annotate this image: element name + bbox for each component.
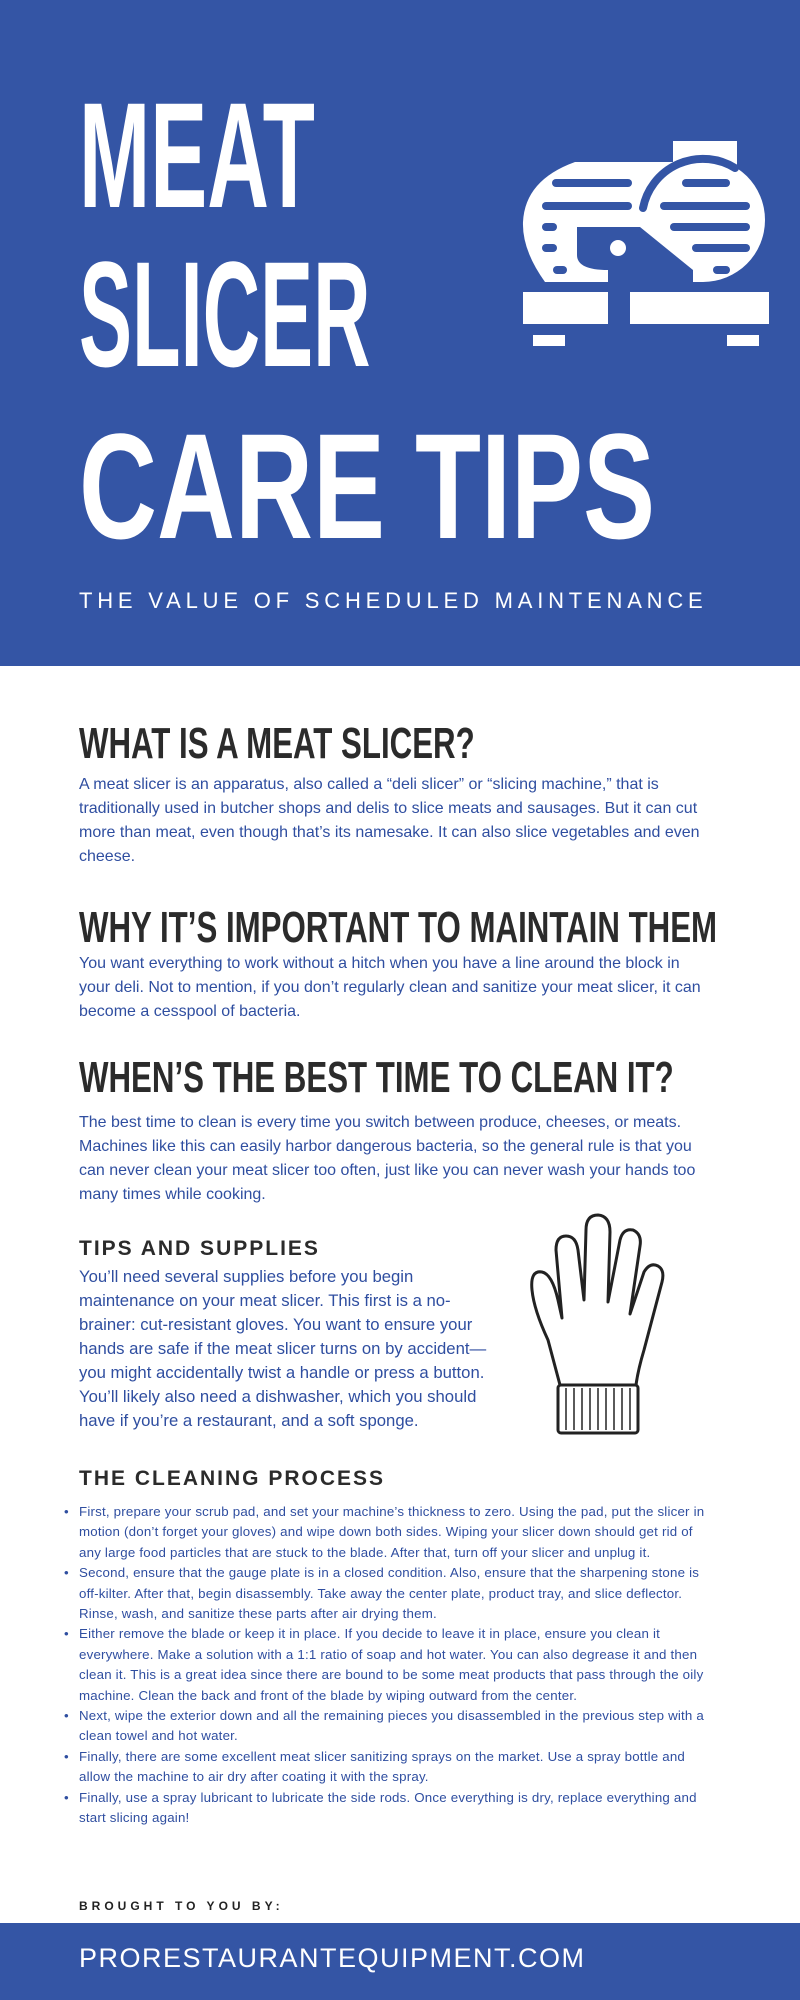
footer url: PRORESTAURANTEQUIPMENT.COM xyxy=(79,1943,586,1973)
list: cleaning steps: Finally, use a spray lubricant to lubricate the side rods. Once everything is dry, replace everything and start slicing again! xyxy=(79,1790,697,1825)
heading: why important: WHY IT’S IMPORTANT TO MAINTAIN THEM xyxy=(79,903,717,952)
icon: meat slicer xyxy=(522,141,769,346)
list: cleaning steps xyxy=(64,1504,704,1825)
text: tips: You’ll need several supplies before you begin maintenance on your meat slicer. This first is a no-brainer: cut-resistant gloves. You want to ensure your hands are safe if the meat slicer turns on by accident—you might accidentally twist a handle or press a button. You’ll likely also need a dishwasher, which you should have if you’re a restaurant, and a soft sponge. xyxy=(79,1267,486,1430)
icon: glove xyxy=(530,1214,664,1434)
subtitle: THE VALUE OF SCHEDULED MAINTENANCE xyxy=(79,588,708,613)
title xyxy=(79,71,655,570)
list: cleaning steps: Finally, there are some excellent meat slicer sanitizing sprays on the market. Use a spray bottle and allow the machine to air dry after coating it with the spray. xyxy=(79,1749,685,1784)
list: cleaning steps: Next, wipe the exterior down and all the remaining pieces you disassembled in the previous step with a clean towel and hot water. xyxy=(79,1708,704,1743)
list: cleaning steps: Either remove the blade or keep it in place. If you decide to leave it in place, ensure you clean it everywhere. Make a solution with a 1:1 ratio of soap and hot water. You can also degrease it and then clean it. This is a great idea since there are bound to be some meat products that pass through the oily machine. Clean the back and front of the blade by wiping outward from the center. xyxy=(79,1626,703,1703)
title: SLICER xyxy=(79,230,371,398)
title: MEAT xyxy=(79,71,315,239)
text: why: You want everything to work without a hitch when you have a line around the block in your deli. Not to mention, if you don’t regularly clean and sanitize your meat slicer, it can become a cesspool of bacteria. xyxy=(79,955,701,1020)
list: cleaning steps: Second, ensure that the gauge plate is in a closed condition. Also, ensure that the sharpening stone is off-kilter. After that, begin disassembly. Take away the center plate, product tray, and slice deflector. Rinse, wash, and sanitize these parts after air drying them. xyxy=(79,1565,699,1621)
heading: tips and supplies: TIPS AND SUPPLIES xyxy=(79,1237,320,1260)
text: what is: A meat slicer is an apparatus, also called a “deli slicer” or “slicing machine,” that is traditionally used in butcher shops and delis to slice meats and sausages. But it can cut more than meat, even though that’s its namesake. It can also slice vegetables and even cheese. xyxy=(79,776,700,865)
footer xyxy=(0,1923,800,2000)
heading: what is a meat slicer: WHAT IS A MEAT SLICER? xyxy=(79,719,475,768)
heading: cleaning process: THE CLEANING PROCESS xyxy=(79,1467,385,1490)
text: when: The best time to clean is every time you switch between produce, cheeses, or meats. Machines like this can easily harbor dangerous bacteria, so the general rule is that you can never clean your meat slicer too often, just like you can never wash your hands too many times while cooking. xyxy=(79,1114,695,1203)
title: CARE TIPS xyxy=(79,402,655,570)
list: cleaning steps: First, prepare your scrub pad, and set your machine’s thickness to zero. Using the pad, put the slicer in motion (don’t forget your gloves) and wipe down both sides. Wiping your slicer down should get rid of any large food particles that are stuck to the blade. After that, turn off your slicer and unplug it. xyxy=(79,1504,704,1560)
text: brought to you by: BROUGHT TO YOU BY: xyxy=(79,1899,284,1913)
header banner xyxy=(0,0,800,666)
heading: when: WHEN’S THE BEST TIME TO CLEAN IT? xyxy=(79,1053,674,1102)
